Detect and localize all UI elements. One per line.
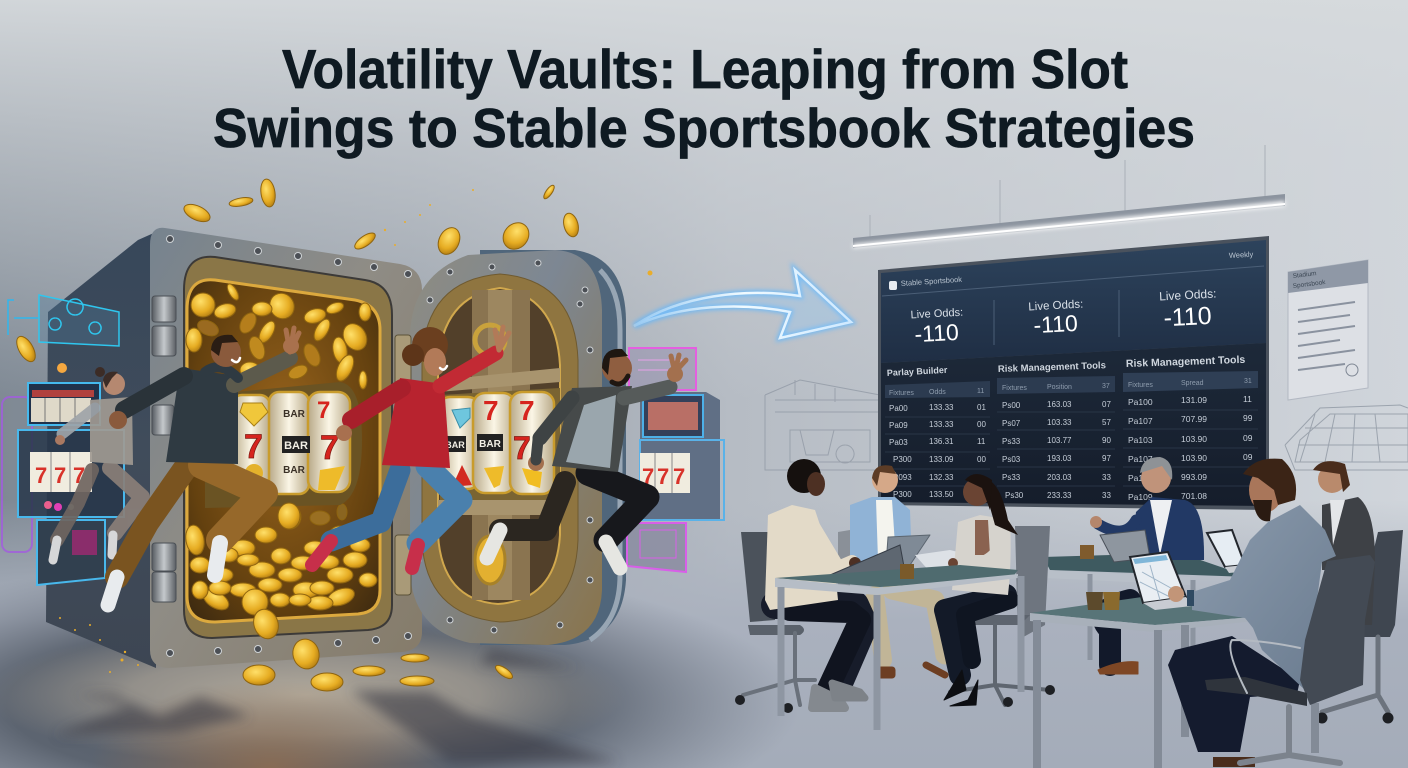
person: woman red hoodie bbox=[312, 327, 509, 568]
table: risk management tools right: 701.08 bbox=[1181, 491, 1207, 501]
table: risk management tools right: Pa100 bbox=[1128, 473, 1153, 483]
document panel on back wall: Stadium bbox=[1292, 270, 1317, 280]
table: parlay builder: 11 bbox=[977, 388, 984, 395]
coins inside vault lower pile bbox=[184, 504, 377, 614]
table: parlay builder: P300 bbox=[893, 490, 912, 499]
table: parlay builder: 132.33 bbox=[929, 473, 954, 482]
title bbox=[213, 38, 1195, 159]
chair and person: woman seated bbox=[944, 474, 1055, 707]
table: parlay builder: Pa00 bbox=[889, 404, 908, 413]
table: risk management tools centre: Ps30 bbox=[1005, 491, 1024, 500]
slot reels in door: BAR bbox=[479, 439, 502, 450]
slot machine left neon bbox=[2, 300, 124, 585]
table: parlay builder: Parlay Builder bbox=[887, 365, 948, 378]
live odds column 2: Live Odds: bbox=[1028, 299, 1084, 313]
table: risk management tools centre: 233.33 bbox=[1047, 491, 1072, 500]
table: risk management tools right: Pa109 bbox=[1128, 492, 1153, 502]
document panel on back wall: Sportsbook bbox=[1292, 279, 1327, 290]
table: risk management tools centre: 90 bbox=[1102, 436, 1111, 445]
table: risk management tools right: 103.90 bbox=[1181, 434, 1207, 444]
table: parlay builder: 00 bbox=[977, 420, 986, 429]
table: risk management tools right: 09 bbox=[1243, 433, 1253, 443]
coins inside vault upper bbox=[186, 282, 372, 389]
table: risk management tools centre: Ps33 bbox=[1002, 437, 1021, 446]
person: man navy hoodie bbox=[108, 328, 299, 605]
laptop with spreadsheet front bbox=[1130, 552, 1192, 610]
door gold ring bbox=[422, 274, 578, 622]
door hinge bbox=[395, 335, 411, 595]
slot reels in door: 7 bbox=[483, 395, 499, 426]
table: risk management tools right: 993.09 bbox=[1181, 472, 1207, 482]
front person shoes bbox=[1213, 757, 1255, 767]
table: risk management tools centre: Ps03 bbox=[1002, 455, 1021, 464]
live odds column 1: Live Odds: bbox=[910, 307, 963, 321]
door rivets bbox=[415, 260, 593, 633]
table: risk management tools right: Fixtures bbox=[1128, 382, 1153, 389]
table: risk management tools centre: 97 bbox=[1102, 454, 1111, 463]
vault door bbox=[395, 250, 626, 645]
live odds column 2: -110 bbox=[1033, 310, 1078, 338]
live odds column 3: -110 bbox=[1163, 302, 1212, 332]
laptop small back bbox=[1207, 530, 1250, 573]
slot reels in vault: 7 bbox=[317, 397, 330, 424]
table: parlay builder: P093 bbox=[893, 473, 912, 482]
sketch: back wall stadium right bbox=[1285, 405, 1408, 470]
laptop on table 1 bbox=[830, 545, 1010, 578]
slot reels in vault: BAR bbox=[283, 465, 306, 476]
hinges bbox=[152, 296, 176, 602]
vault interior bbox=[187, 280, 380, 622]
table: parlay builder: 11 bbox=[977, 437, 986, 446]
front person legs bbox=[1168, 636, 1300, 752]
table: risk management tools centre bbox=[997, 360, 1115, 500]
front person head bbox=[1243, 459, 1296, 521]
table: risk management tools right: Pa103 bbox=[1128, 435, 1153, 445]
slot reels in vault: 7 bbox=[320, 429, 339, 467]
person: back chair and man right suit bbox=[1313, 461, 1403, 724]
table: risk management tools centre: 203.03 bbox=[1047, 473, 1072, 482]
table: risk management tools right: Spread bbox=[1181, 380, 1204, 387]
sketch: back wall stadium left bbox=[765, 380, 880, 470]
slot reels in door: 7 bbox=[519, 395, 535, 426]
front person shirt bbox=[1192, 505, 1336, 690]
person: man dark jacket bbox=[487, 349, 686, 568]
table: risk management tools centre: 37 bbox=[1102, 383, 1110, 390]
table: risk management tools centre: 193.03 bbox=[1047, 454, 1072, 463]
door opening bbox=[438, 288, 560, 604]
flying coins bbox=[13, 178, 581, 691]
table: parlay builder: 133.33 bbox=[929, 420, 954, 429]
live odds column 3: Live Odds: bbox=[1159, 287, 1217, 303]
live odds column 1 bbox=[910, 307, 963, 347]
table 1 front bbox=[775, 564, 1021, 730]
document panel on back wall bbox=[1288, 260, 1368, 400]
table: risk management tools centre: 07 bbox=[1102, 400, 1111, 409]
table: risk management tools centre: 57 bbox=[1102, 418, 1111, 427]
slot machine right neon: 7 bbox=[642, 464, 654, 489]
slot machine left neon: 7 bbox=[73, 463, 85, 488]
table: risk management tools centre: 33 bbox=[1102, 473, 1111, 482]
door front plate bbox=[410, 250, 602, 645]
table: parlay builder: Odds bbox=[929, 389, 946, 396]
title: Volatility Vaults: Leaping from Slot bbox=[282, 38, 1128, 100]
live odds column 3 bbox=[1159, 287, 1217, 332]
person: man front grey shirt with chair bbox=[1168, 459, 1375, 767]
slot machine left neon: 7 bbox=[54, 463, 66, 488]
table: risk management tools right: 103.90 bbox=[1181, 453, 1207, 463]
table: risk management tools right: 09 bbox=[1243, 452, 1253, 462]
door thickness bbox=[480, 250, 626, 645]
title: Swings to Stable Sportsbook Strategies bbox=[213, 97, 1195, 159]
table: parlay builder bbox=[885, 365, 990, 499]
slot reels in door bbox=[438, 388, 560, 500]
table: parlay builder: P300 bbox=[893, 455, 912, 464]
live odds column 2 bbox=[1028, 299, 1084, 338]
person: man light blue blazer bbox=[838, 465, 945, 675]
screen header bbox=[889, 250, 1254, 290]
slot machine left neon: 7 bbox=[35, 463, 47, 488]
table: parlay builder: 133.09 bbox=[929, 455, 954, 464]
slot reels in door: BAR bbox=[445, 440, 465, 450]
arrow: slots to sportsbook bbox=[634, 270, 851, 338]
slot reels in vault bbox=[205, 382, 362, 508]
person: small woman jumping left bbox=[53, 367, 142, 560]
table: risk management tools right: 31 bbox=[1244, 378, 1252, 385]
table: risk management tools right: 131.09 bbox=[1181, 395, 1207, 405]
slot machine right neon bbox=[627, 348, 724, 572]
person: older man navy blazer bbox=[1090, 457, 1204, 674]
table: risk management tools right: Pa107 bbox=[1128, 454, 1153, 464]
slot machine right neon: 7 bbox=[673, 464, 685, 489]
front chair bbox=[1205, 555, 1375, 763]
coffee cups bbox=[1086, 592, 1120, 610]
table: risk management tools centre: Ps33 bbox=[1002, 473, 1021, 482]
table: risk management tools right: 99 bbox=[1243, 413, 1253, 423]
table: risk management tools right: Pa107 bbox=[1128, 416, 1153, 426]
table: parlay builder: Pa09 bbox=[889, 421, 908, 430]
screen header: Stable Sportsbook bbox=[901, 275, 963, 288]
vault body bbox=[46, 228, 422, 668]
table: risk management tools centre: Position bbox=[1047, 384, 1072, 391]
table: risk management tools right: Pa100 bbox=[1128, 397, 1153, 407]
gold sparks bbox=[59, 189, 652, 673]
vault inner frame bbox=[184, 257, 392, 638]
table 3 front bbox=[1030, 597, 1315, 768]
slot reels in door: 7 bbox=[513, 430, 531, 466]
table 2 back bbox=[1043, 545, 1250, 700]
table: risk management tools centre: Ps00 bbox=[1002, 401, 1021, 410]
table: parlay builder: 00 bbox=[977, 455, 986, 464]
table: risk management tools centre: 163.03 bbox=[1047, 400, 1072, 409]
table: parlay builder: 01 bbox=[977, 403, 986, 412]
table: parlay builder: 133.50 bbox=[929, 490, 954, 499]
dashboard screen bbox=[878, 236, 1269, 510]
vault front plate bbox=[150, 228, 422, 668]
neon holo panel bbox=[39, 295, 119, 346]
table: risk management tools right bbox=[1123, 354, 1258, 502]
slot reels in vault: 7 bbox=[244, 428, 263, 466]
vault side panel bbox=[46, 232, 156, 668]
screen header: Weekly bbox=[1229, 250, 1254, 260]
slot reels in vault: BAR bbox=[283, 409, 306, 420]
table: risk management tools centre: Fixtures bbox=[1002, 385, 1027, 392]
table: parlay builder: Pa03 bbox=[889, 438, 908, 447]
ceiling light bbox=[853, 145, 1285, 248]
slot reels in vault: BAR bbox=[284, 440, 308, 452]
slot machine right neon: 7 bbox=[657, 464, 669, 489]
table: risk management tools right: Risk Management Tools bbox=[1126, 354, 1246, 370]
rivets bbox=[166, 236, 412, 656]
table: risk management tools centre: 103.77 bbox=[1047, 436, 1072, 445]
person: seated man cream sweater bbox=[735, 459, 865, 713]
table: risk management tools centre: Risk Management Tools bbox=[998, 360, 1106, 375]
table: risk management tools centre: 103.33 bbox=[1047, 418, 1072, 427]
table: parlay builder: 136.31 bbox=[929, 437, 954, 446]
table: parlay builder: 133.33 bbox=[929, 403, 954, 412]
table: risk management tools right: 707.99 bbox=[1181, 414, 1207, 424]
table: parlay builder: Fixtures bbox=[889, 390, 914, 397]
table: risk management tools centre: 33 bbox=[1102, 491, 1111, 500]
table: risk management tools right: 11 bbox=[1243, 394, 1252, 404]
live odds column 1: -110 bbox=[914, 319, 959, 347]
table: risk management tools centre: Ps07 bbox=[1002, 419, 1021, 428]
